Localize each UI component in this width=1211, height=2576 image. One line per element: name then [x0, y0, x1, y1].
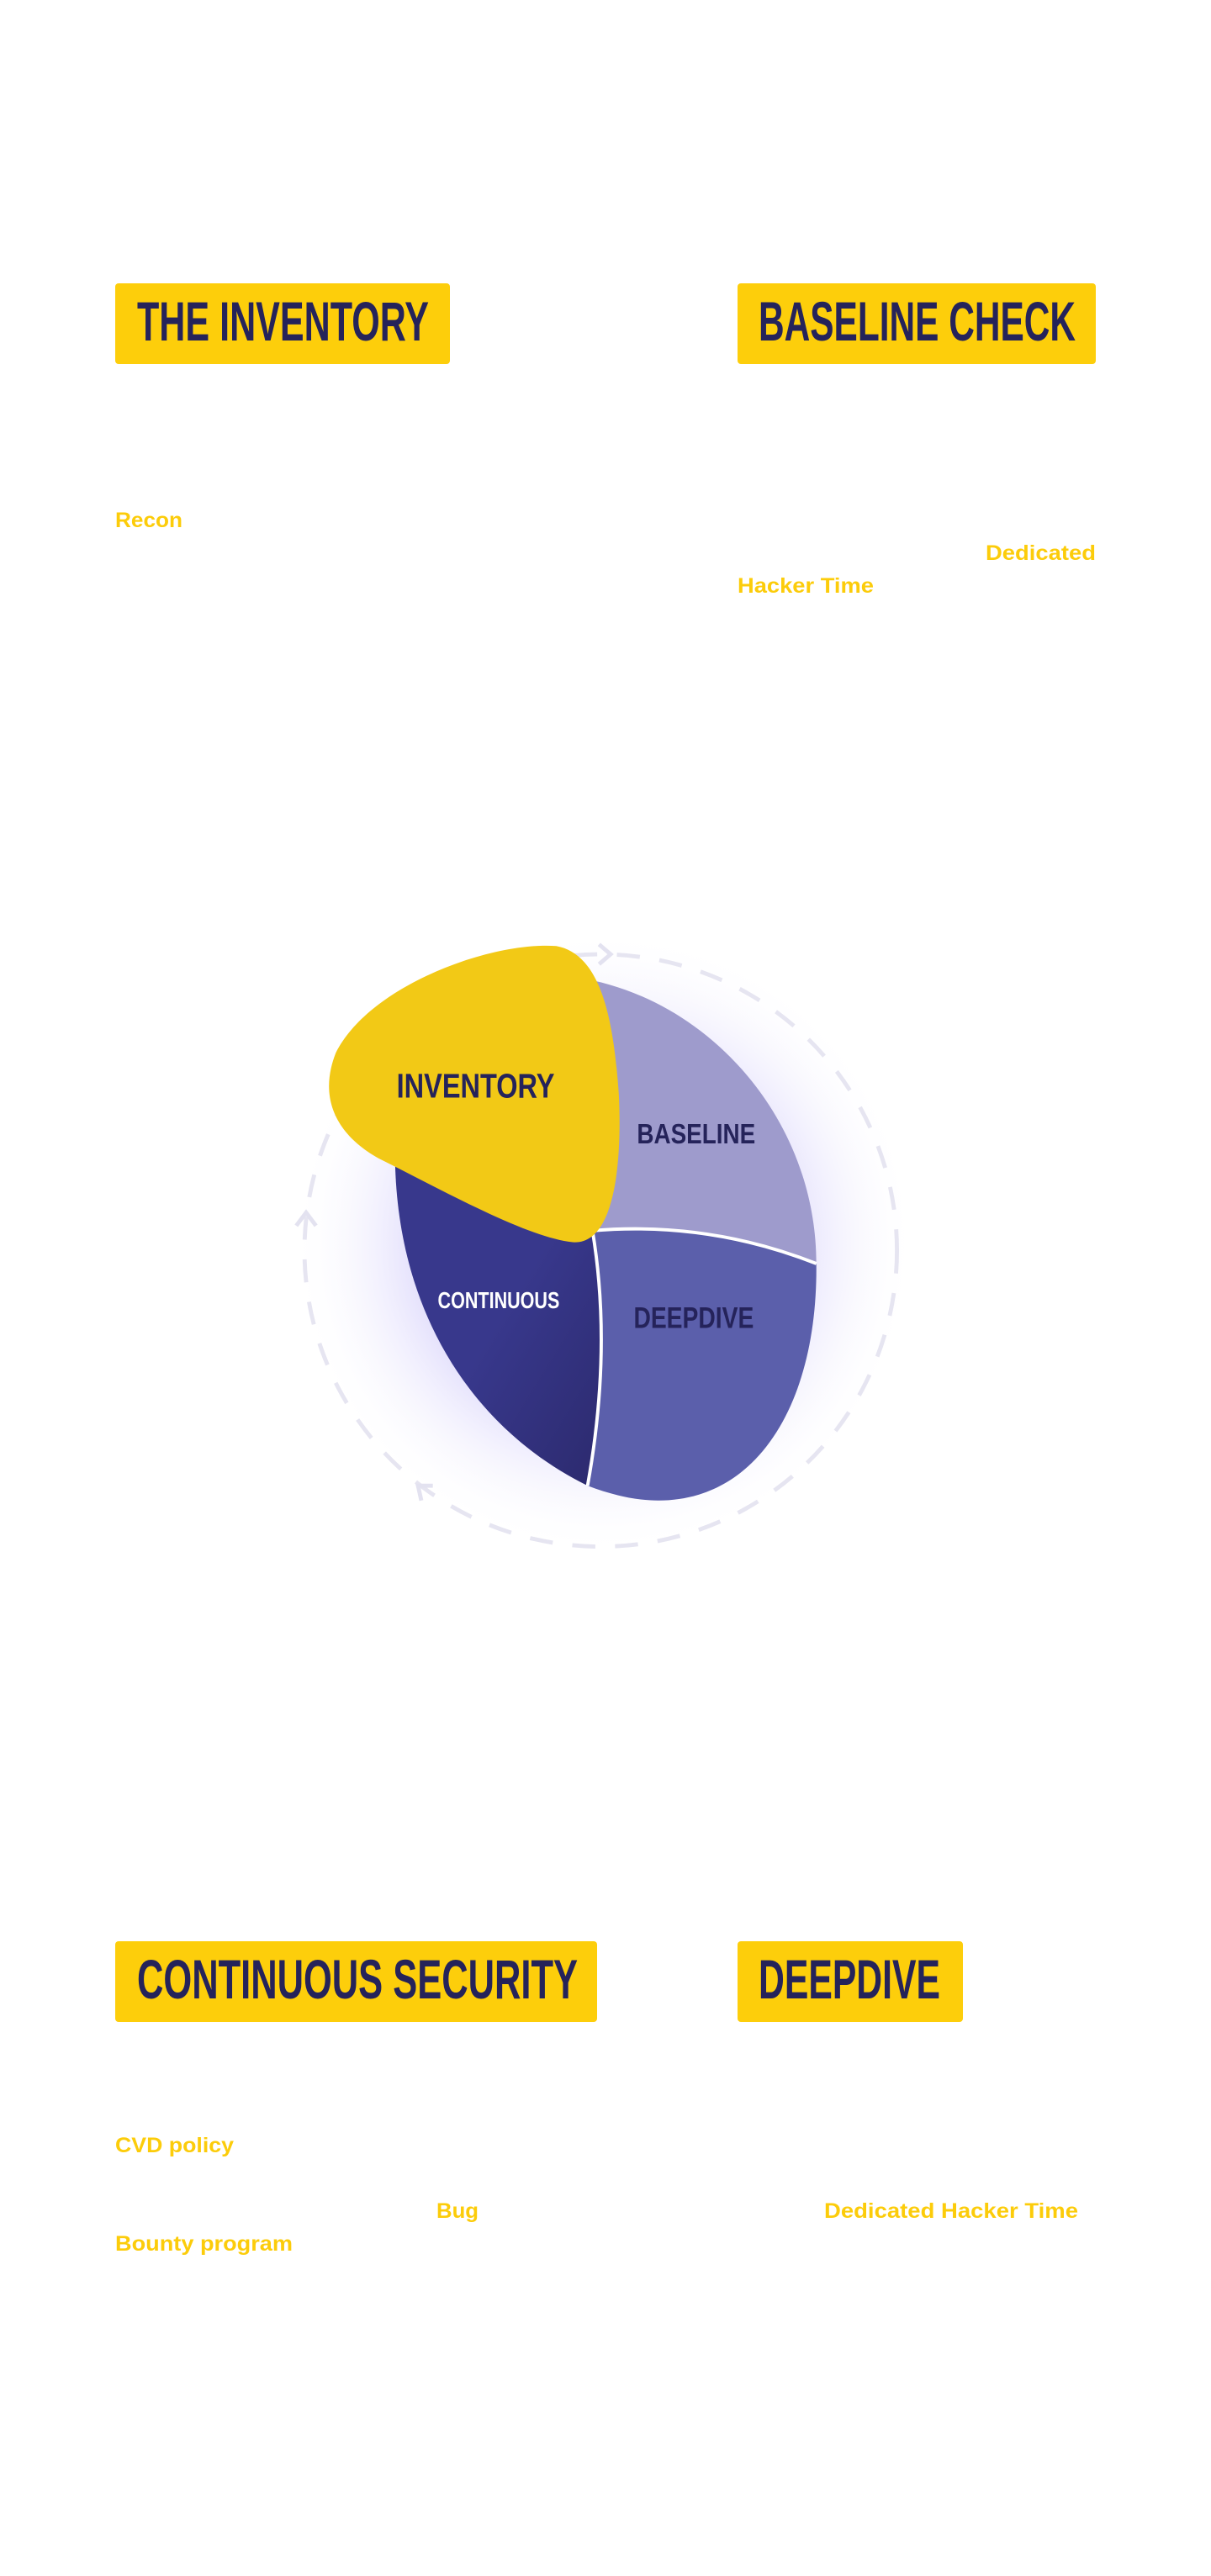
text: recon: Recon [115, 509, 182, 532]
heading: the inventory [115, 283, 450, 364]
text: bug: Bug [436, 2199, 479, 2223]
text: cvd policy: CVD policy [115, 2134, 234, 2157]
label: deepdive: DEEPDIVE [633, 1301, 754, 1334]
label: inventory: INVENTORY [397, 1066, 555, 1105]
slice: continuous [395, 1152, 601, 1486]
text: dedicated hacker time: Dedicated Hacker Time [824, 2199, 1078, 2223]
glow [291, 930, 917, 1555]
dashed cycle arrow [296, 944, 897, 1547]
slice: baseline [576, 977, 817, 1264]
slice: deepdive [588, 1229, 817, 1501]
heading: deepdive [738, 1941, 963, 2022]
slice: inventory blob [329, 946, 620, 1243]
label: continuous: CONTINUOUS [438, 1287, 559, 1313]
dividers [588, 1229, 817, 1486]
text: dedicated: Dedicated [986, 541, 1096, 565]
label: baseline: BASELINE [637, 1119, 755, 1150]
heading: the inventory: THE INVENTORY [137, 290, 429, 352]
heading: continuous security [115, 1941, 597, 2022]
text: bounty program: Bounty program [115, 2232, 293, 2256]
heading: deepdive: DEEPDIVE [759, 1948, 940, 2010]
chart: cycle pie [291, 930, 917, 1555]
heading: continuous security: CONTINUOUS SECURITY [137, 1948, 578, 2010]
text: hacker time: Hacker Time [738, 574, 874, 598]
heading: baseline check [738, 283, 1096, 364]
